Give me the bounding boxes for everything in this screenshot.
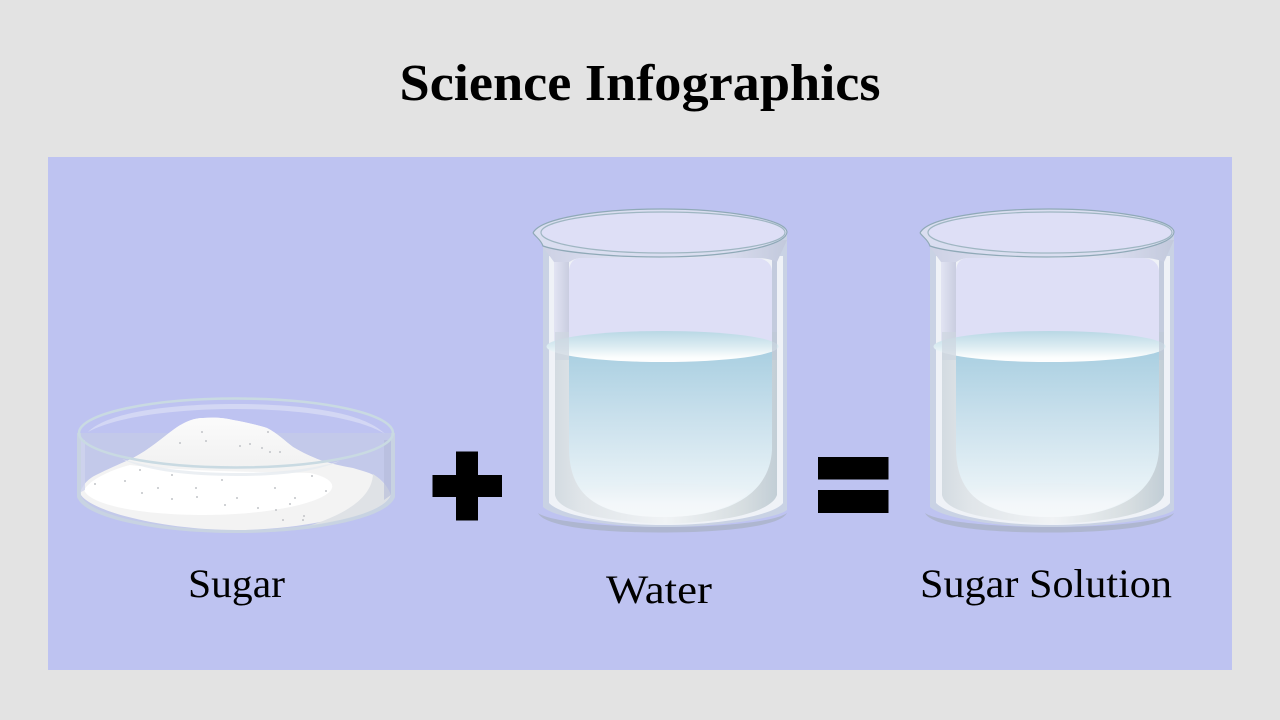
icon: beaker of water: [533, 209, 787, 532]
icon: beaker of sugar solution: [920, 209, 1174, 532]
title: Science Infographics: [400, 55, 880, 112]
icon: plus sign: [432, 452, 502, 520]
icon: petri dish with sugar: [77, 398, 395, 533]
panel: equation: [48, 157, 1232, 670]
label: sugar solution: Sugar Solution: [920, 561, 1172, 606]
label: sugar: Sugar: [188, 561, 285, 606]
icon: equals sign: [818, 457, 888, 513]
label: water: Water: [606, 567, 712, 612]
